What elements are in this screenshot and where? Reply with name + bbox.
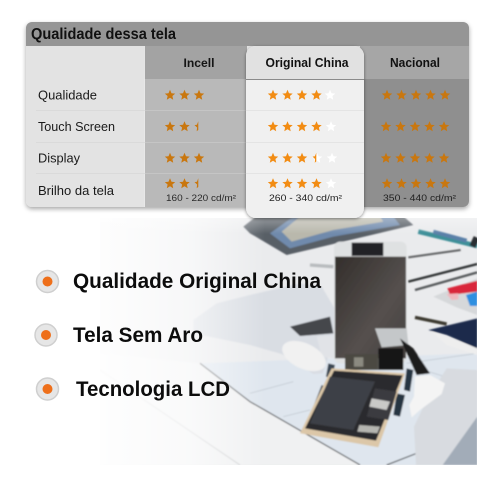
stars: Incell xyxy=(165,90,204,188)
column: Original China highlight: 260 - 340 cd/m² xyxy=(269,193,342,203)
loose part xyxy=(432,332,477,355)
row labels: Qualidade xyxy=(38,88,97,102)
row labels: Touch Screen xyxy=(38,119,115,134)
right of phone bars xyxy=(404,368,413,392)
row labels: Brilho da tela xyxy=(38,183,115,198)
tweezers xyxy=(400,338,430,375)
parts box xyxy=(433,278,477,315)
column: Nacional xyxy=(360,46,469,207)
tray xyxy=(243,213,413,255)
header bar xyxy=(26,22,469,46)
right glove xyxy=(414,368,477,465)
column: Original China highlight: Original China xyxy=(266,56,350,70)
column: Nacional: Nacional xyxy=(390,56,440,70)
phone body xyxy=(300,368,405,447)
column: Original China highlight xyxy=(246,46,364,218)
brightness: Incell: 160 - 220 cd/m² xyxy=(166,193,236,203)
column: Incell: Incell xyxy=(184,56,214,70)
bullet: Tecnologia LCD: Tecnologia LCD xyxy=(76,377,230,401)
phone screen module xyxy=(334,242,407,363)
mat xyxy=(200,353,477,465)
left glove xyxy=(193,283,334,374)
bullet: Qualidade Original China: Qualidade Original China xyxy=(73,269,322,293)
column: Incell xyxy=(144,46,247,207)
tools xyxy=(418,232,477,246)
row labels xyxy=(38,88,115,198)
brightness: Nacional: 350 - 440 cd/m² xyxy=(383,193,456,203)
comparison table panel xyxy=(26,22,469,218)
row labels: Display xyxy=(38,150,80,166)
row dividers xyxy=(36,110,247,174)
stars: Nacional xyxy=(381,90,450,188)
heading: Qualidade dessa tela xyxy=(31,26,176,43)
photo: phone repair on a work mat xyxy=(150,218,477,465)
bullet: Tela Sem Aro: Tela Sem Aro xyxy=(73,323,203,347)
